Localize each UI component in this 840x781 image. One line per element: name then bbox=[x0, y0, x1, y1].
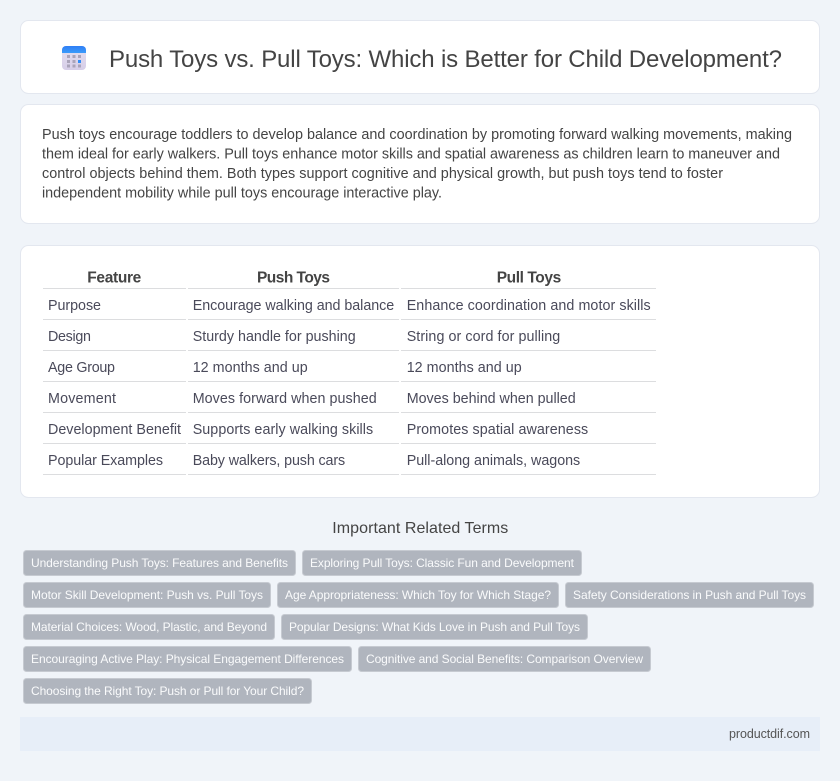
panel: comparison table bbox=[20, 246, 820, 498]
tag bbox=[24, 582, 270, 608]
row: popular examples bbox=[48, 453, 580, 469]
row: movement bbox=[48, 391, 576, 407]
tag bbox=[24, 678, 312, 704]
icon: calendar bbox=[62, 46, 86, 70]
row: age group bbox=[48, 360, 522, 376]
tag: Exploring Pull Toys: Classic Fun and Development bbox=[310, 556, 575, 570]
text block: introduction: control objects behind them. Both types support cognitive and physical growth, but push toys tend to foster bbox=[42, 166, 723, 182]
text block: introduction: them ideal for early walkers. Pull toys enhance motor skills and spatial awareness as children learn to maneuver and bbox=[42, 146, 780, 162]
tag bbox=[24, 646, 352, 672]
footer bbox=[20, 717, 820, 751]
table header: Feature bbox=[87, 270, 142, 286]
row: purpose: Enhance coordination and motor skills bbox=[407, 298, 651, 314]
panel: header bbox=[20, 20, 820, 94]
panel: introduction bbox=[20, 104, 820, 224]
table header bbox=[87, 270, 561, 286]
tag: Understanding Push Toys: Features and Benefits bbox=[31, 556, 288, 570]
text block: introduction bbox=[42, 127, 792, 202]
row: development benefit: Promotes spatial awareness bbox=[407, 422, 588, 438]
tag bbox=[24, 614, 274, 640]
row: design: Design bbox=[48, 329, 91, 345]
tag bbox=[24, 550, 296, 576]
row: age group: 12 months and up bbox=[407, 360, 522, 376]
tag bbox=[358, 646, 650, 672]
row: popular examples: Popular Examples bbox=[48, 453, 163, 469]
text block: introduction: independent mobility while pull toys encourage interactive play. bbox=[42, 186, 442, 202]
row: movement: Movement bbox=[48, 391, 116, 407]
tag: Age Appropriateness: Which Toy for Which Stage? bbox=[285, 588, 551, 602]
row: design bbox=[48, 329, 560, 345]
tag: Motor Skill Development: Push vs. Pull Toys bbox=[31, 588, 263, 602]
tag: Cognitive and Social Benefits: Comparison Overview bbox=[366, 652, 643, 666]
table header: Push Toys bbox=[257, 270, 330, 286]
row: purpose: Purpose bbox=[48, 298, 101, 314]
tag: Popular Designs: What Kids Love in Push and Pull Toys bbox=[289, 620, 580, 634]
row: purpose: Encourage walking and balance bbox=[193, 298, 394, 314]
row: development benefit: Supports early walking skills bbox=[193, 422, 373, 438]
heading: important related terms: Important Related Terms bbox=[332, 520, 508, 537]
tag bbox=[282, 614, 588, 640]
row: movement: Moves behind when pulled bbox=[407, 391, 576, 407]
table header: Pull Toys bbox=[497, 270, 561, 286]
tag: Safety Considerations in Push and Pull Toys bbox=[573, 588, 806, 602]
tag: Material Choices: Wood, Plastic, and Beyond bbox=[31, 620, 267, 634]
tag bbox=[278, 582, 558, 608]
row: design: Sturdy handle for pushing bbox=[193, 329, 356, 345]
tag bbox=[566, 582, 814, 608]
row: age group: Age Group bbox=[48, 360, 115, 376]
row: popular examples: Baby walkers, push cars bbox=[193, 453, 345, 469]
title: Push Toys vs. Pull Toys: Which is Better for Child Development? bbox=[109, 46, 782, 73]
tag: Choosing the Right Toy: Push or Pull for Your Child? bbox=[31, 684, 304, 698]
tag: Encouraging Active Play: Physical Engagement Differences bbox=[31, 652, 344, 666]
row: development benefit: Development Benefit bbox=[48, 422, 181, 438]
footer: productdif.com bbox=[729, 727, 810, 741]
row: purpose bbox=[48, 298, 651, 314]
row: age group: 12 months and up bbox=[193, 360, 308, 376]
row: movement: Moves forward when pushed bbox=[193, 391, 377, 407]
row: development benefit bbox=[48, 422, 588, 438]
text block: introduction: Push toys encourage toddlers to develop balance and coordination by promoting forward walking movements, making bbox=[42, 127, 792, 143]
row: popular examples: Pull-along animals, wagons bbox=[407, 453, 580, 469]
tags: related terms bbox=[24, 550, 814, 704]
row: design: String or cord for pulling bbox=[407, 329, 560, 345]
tag bbox=[302, 550, 582, 576]
